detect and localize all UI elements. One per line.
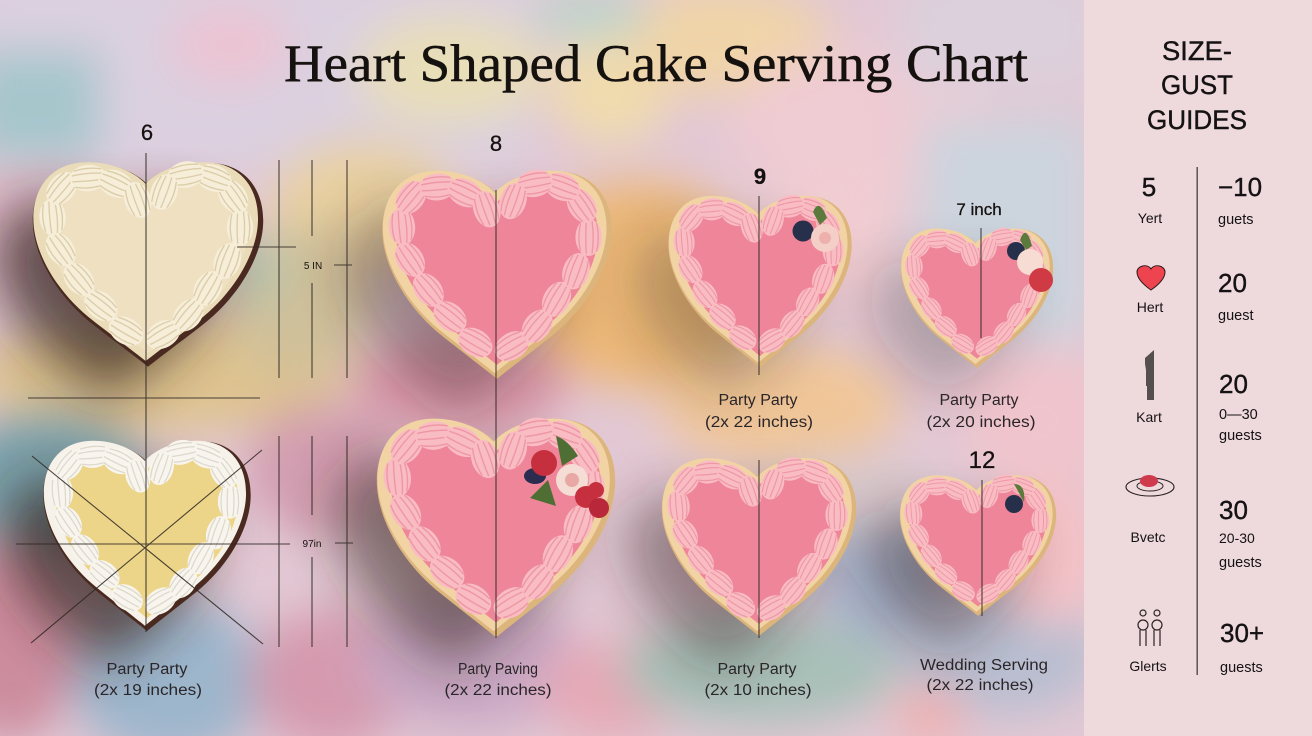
- size labels: 12: [969, 447, 995, 474]
- panel heading: SIZE-: [1162, 36, 1232, 66]
- row 3 left label: Kart: [1136, 409, 1162, 425]
- panel: size-guest guides: [1084, 0, 1312, 736]
- icon: red heart: [1137, 266, 1165, 290]
- row 1 left: 5: [1142, 172, 1156, 202]
- cake captions: (2x 20 inches): [926, 414, 1036, 431]
- row 3 right: 20: [1219, 369, 1248, 399]
- row 4 right: guests: [1219, 555, 1262, 571]
- row 4 left label: Bvetc: [1130, 529, 1166, 545]
- row 2 left label: Hert: [1137, 299, 1163, 315]
- size labels: 6: [141, 120, 153, 145]
- cake: 8 inch pink: [382, 167, 612, 379]
- cake: sliced sponge: [43, 437, 251, 631]
- cake captions: Party Party: [718, 392, 798, 409]
- cake: 9 inch pink with berry: [668, 193, 852, 368]
- row 1 right: −10: [1218, 172, 1262, 202]
- row 3 right: 0—30: [1219, 407, 1258, 423]
- row 4 right: [1219, 495, 1262, 571]
- measurement lines: [16, 153, 982, 647]
- cake: 7 inch pink with berries: [901, 226, 1053, 368]
- icon: knife: [1145, 350, 1154, 400]
- panel heading: GUIDES: [1147, 105, 1247, 135]
- row 5 right: guests: [1220, 660, 1263, 676]
- cake captions: Party Party: [940, 392, 1019, 409]
- row 1 right: [1218, 172, 1262, 228]
- cake captions: [94, 392, 1048, 699]
- icon: guests: [1138, 610, 1162, 646]
- cake captions: (2x 22 inches): [444, 682, 552, 699]
- size labels: 9: [754, 164, 766, 189]
- topper: berries and rose: [1007, 233, 1053, 292]
- row 3 right: guests: [1219, 428, 1262, 444]
- cake captions: (2x 10 inches): [704, 682, 812, 699]
- icon: plate: [1126, 475, 1174, 496]
- size labels: 8: [490, 131, 502, 156]
- cake captions: Party Party: [718, 661, 797, 678]
- row 5 right: [1220, 618, 1264, 676]
- cake captions: (2x 19 inches): [94, 682, 202, 699]
- panel heading: GUST: [1161, 70, 1233, 100]
- cake: large pink with berries: [377, 415, 615, 637]
- row 4 right: 30: [1219, 495, 1248, 525]
- row 5 left label: Glerts: [1129, 658, 1167, 674]
- panel heading: [1147, 36, 1247, 135]
- row 4 right: 20-30: [1219, 530, 1255, 546]
- row 1 left: Yert: [1138, 210, 1162, 226]
- size labels: 5 IN: [304, 261, 322, 272]
- size labels: 7 inch: [956, 200, 1002, 219]
- cake captions: (2x 22 inches): [926, 677, 1034, 694]
- cake: medium pink: [662, 455, 856, 636]
- size labels: 97in: [303, 539, 321, 550]
- topper: berry and rose: [792, 206, 839, 252]
- cake: 12 inch pink with berry: [900, 473, 1056, 616]
- row 5 right: 30+: [1220, 618, 1264, 648]
- row 1 left: [1138, 172, 1162, 226]
- cake: 6 inch cream: [33, 158, 263, 367]
- cake captions: Party Paving: [458, 661, 538, 678]
- row 1 right: guets: [1218, 212, 1253, 228]
- topper: blueberry and leaf: [1005, 484, 1024, 513]
- row 2 right: guest: [1218, 308, 1253, 324]
- cake captions: Wedding Serving: [920, 657, 1048, 674]
- topper: raspberries, rose and leaves: [524, 436, 609, 518]
- row 2 right: 20: [1218, 268, 1247, 298]
- size labels: [141, 120, 1002, 550]
- row 3 right: [1219, 369, 1262, 444]
- cake captions: Party Party: [106, 661, 188, 678]
- title: Heart Shaped Cake Serving Chart: [284, 35, 1028, 93]
- cake captions: (2x 22 inches): [705, 414, 813, 431]
- cake shadows: [0, 200, 1022, 670]
- row 2 right: [1218, 268, 1253, 324]
